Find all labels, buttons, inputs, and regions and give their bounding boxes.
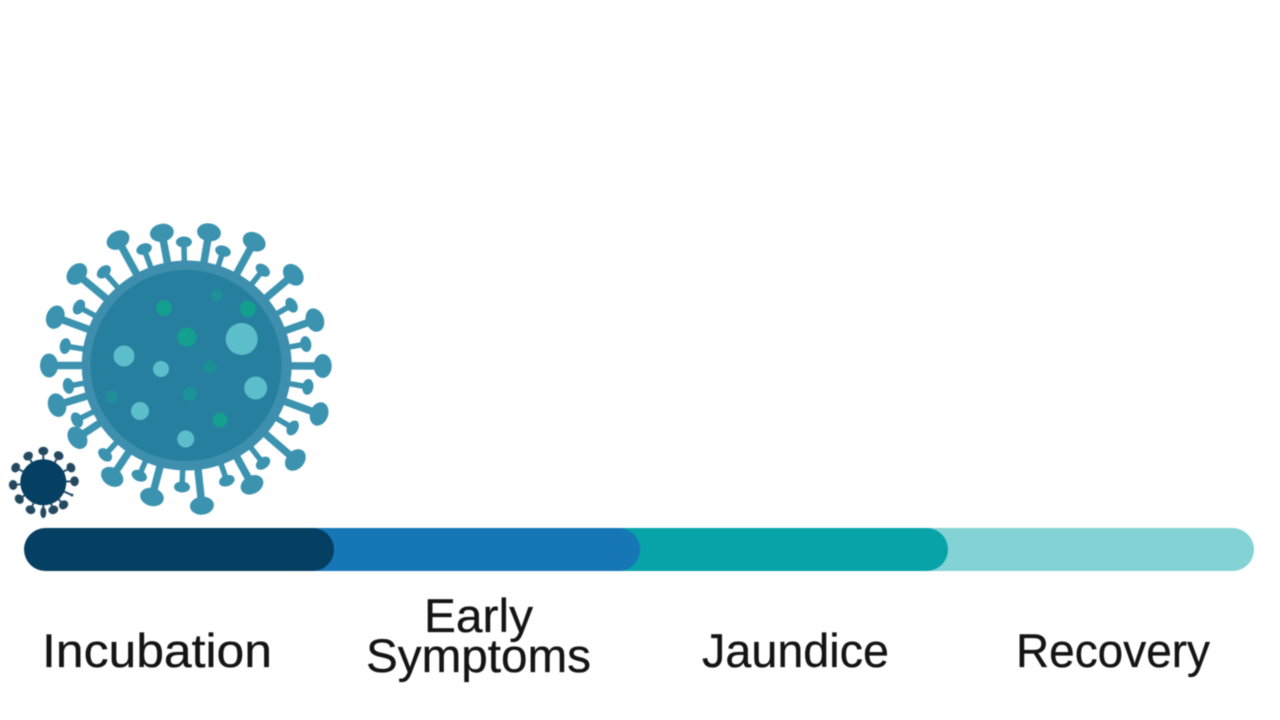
timeline bar	[24, 528, 1254, 571]
small virus spikes	[9, 447, 79, 518]
label: Jaundice: Jaundice	[702, 624, 889, 677]
icon: small dark virus	[9, 447, 79, 518]
virus long spikes	[40, 221, 332, 516]
virus short spikes	[59, 236, 315, 493]
virus light dots	[114, 323, 267, 448]
segment: recovery	[900, 528, 1254, 571]
label: Early Symptoms: Symptoms	[366, 629, 591, 682]
small virus body	[20, 459, 66, 505]
label: Early Symptoms	[366, 589, 591, 682]
segment: early symptoms	[300, 528, 640, 571]
icon: large virus	[40, 221, 332, 516]
segment: incubation	[24, 528, 334, 571]
label: Incubation: Incubation	[42, 624, 272, 677]
label: Recovery: Recovery	[1016, 624, 1210, 677]
virus inner body	[90, 270, 282, 461]
virus green dots	[106, 289, 256, 428]
virus outer body	[82, 260, 292, 470]
segment: jaundice	[600, 528, 948, 571]
label: Early Symptoms: Early	[424, 589, 533, 642]
